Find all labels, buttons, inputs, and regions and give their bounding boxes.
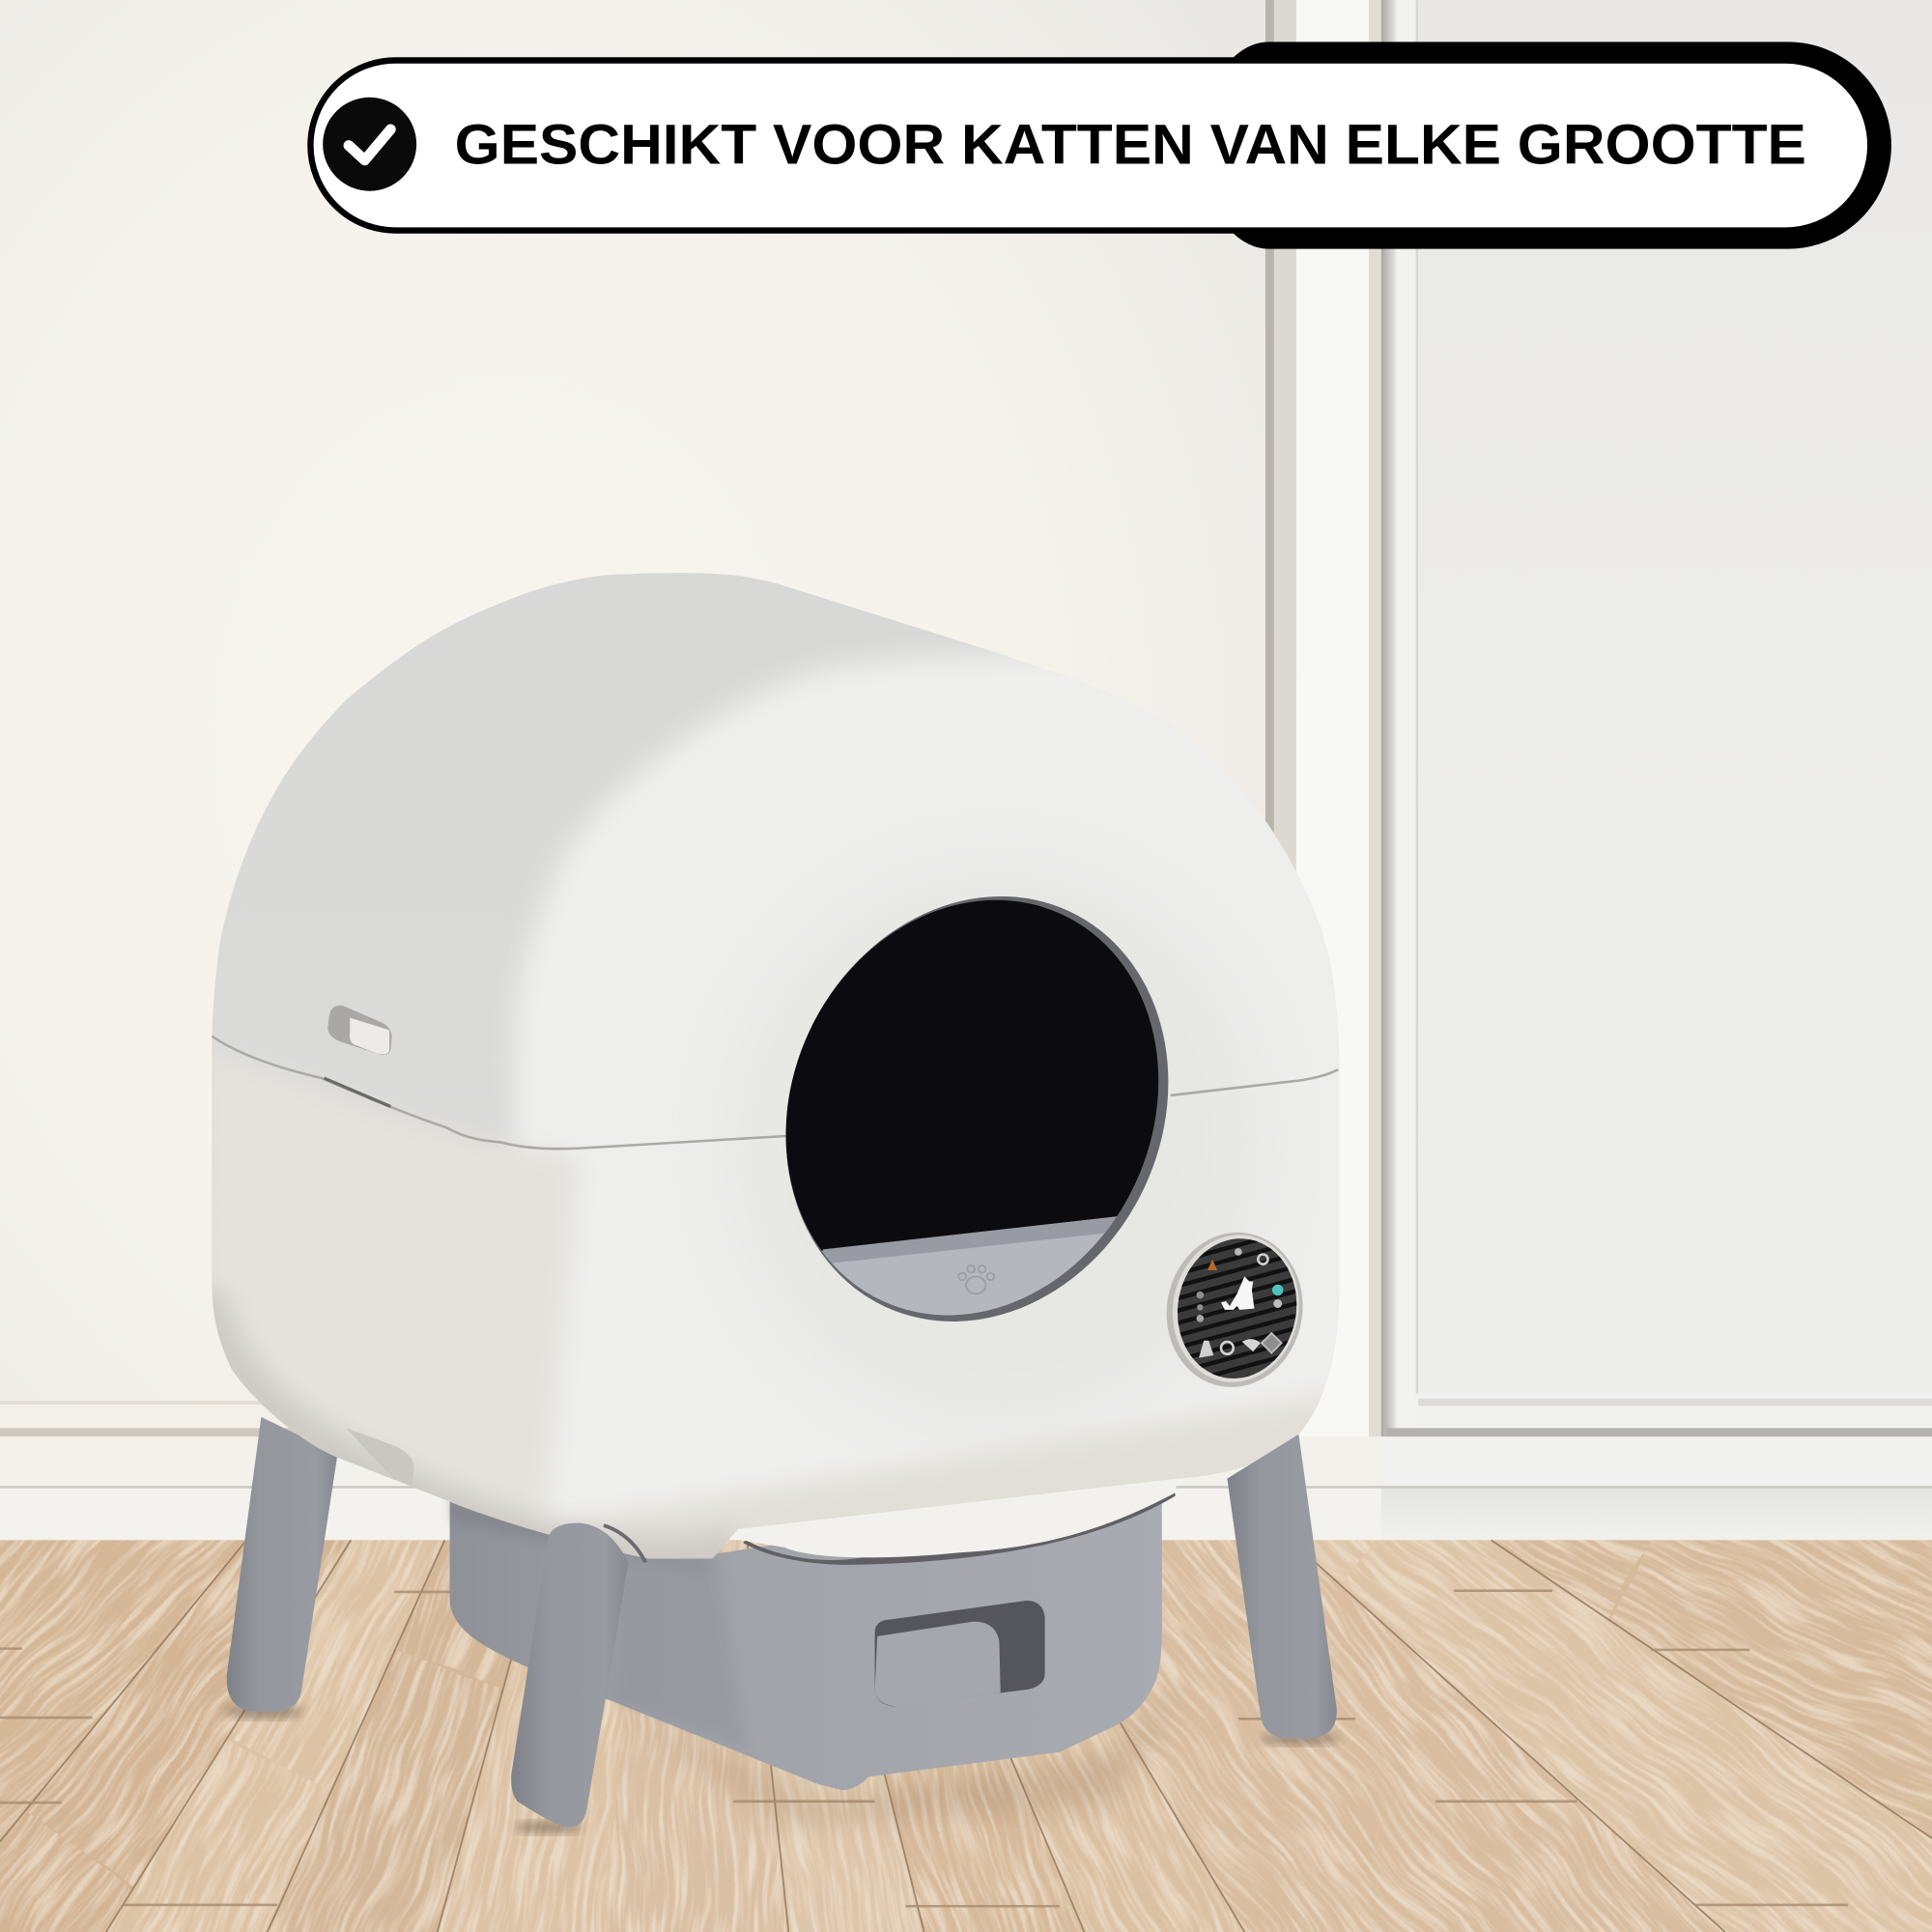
floor shadow (616, 1688, 1182, 1824)
front left leg (511, 1523, 645, 1833)
entrance rim (718, 833, 1236, 1384)
side handle (327, 1006, 392, 1055)
badge (310, 42, 1891, 249)
right leg (1227, 1435, 1339, 1745)
entrance opening (786, 896, 1169, 1321)
control panel (1167, 1233, 1302, 1387)
panel function icons (1199, 1333, 1282, 1358)
main housing (197, 573, 1380, 1589)
product: automatic litter box (197, 573, 1380, 1833)
entrance interior (719, 838, 1225, 1377)
cat and dog icon (1221, 1276, 1254, 1310)
drawer corner shade (616, 1550, 747, 1749)
white drawer lid (738, 1476, 1179, 1565)
window handle (875, 1622, 1001, 1707)
lower back tab (346, 1428, 414, 1486)
drawer shadow under housing (450, 1497, 708, 1577)
housing shading (197, 654, 1380, 1589)
wood grain (0, 1540, 1932, 1932)
waste drawer (450, 1485, 1162, 1790)
housing seam (212, 1037, 1338, 1149)
right wall (1271, 0, 1932, 1540)
paw print (958, 1265, 994, 1293)
panel status lights (1197, 1248, 1283, 1322)
badge back pill (1202, 42, 1891, 249)
icon: check mark (323, 98, 416, 191)
back left leg (224, 1417, 337, 1719)
plank seams (0, 1540, 1932, 1932)
badge front pill (310, 60, 1870, 231)
panel ring (1154, 1222, 1315, 1398)
drawer body (450, 1485, 1162, 1790)
room background (0, 0, 1932, 1540)
entrance step (821, 1216, 1117, 1316)
floor plank tints (0, 1540, 1932, 1932)
wall moldings (0, 0, 1932, 1540)
badge headline: GESCHIKT VOOR KATTEN VAN ELKE GROOTTE (455, 114, 1806, 177)
panel face (1167, 1229, 1308, 1388)
wooden floor (0, 1540, 1932, 1932)
plank end joints (0, 1591, 1848, 1906)
side slit (324, 1078, 390, 1106)
left wall (0, 0, 1271, 1540)
drawer window (875, 1601, 1045, 1707)
